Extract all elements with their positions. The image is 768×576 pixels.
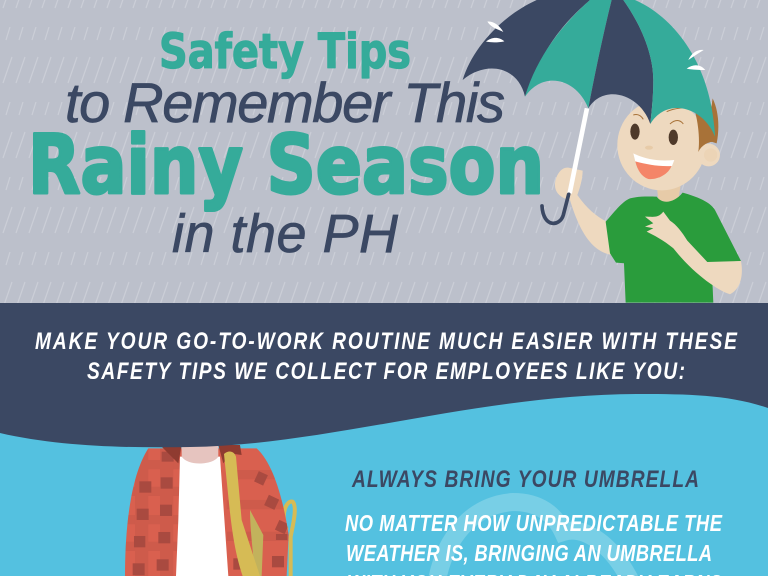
white undershirt bbox=[176, 457, 228, 576]
text block: tip body bbox=[345, 511, 723, 576]
umbrella canopy bbox=[463, 0, 590, 97]
plaid shirt bbox=[125, 448, 289, 576]
icon: umbrella watermark bbox=[437, 502, 630, 576]
right arm and hand bbox=[645, 212, 742, 294]
eyes bbox=[630, 124, 640, 140]
text block: intro: MAKE YOUR GO-TO-WORK ROUTINE MUCH EASIER WITH THESE bbox=[35, 327, 738, 355]
plaid pattern bbox=[125, 448, 293, 576]
nose bbox=[645, 146, 653, 150]
text block: tip body: WEATHER IS, BRINGING AN UMBRELLA bbox=[346, 541, 712, 567]
hair bbox=[695, 112, 715, 152]
panel: rainy header background bbox=[0, 0, 768, 304]
heading: title: Rainy Season bbox=[28, 119, 544, 213]
ear bbox=[697, 144, 720, 166]
panel: intro banner bbox=[0, 303, 768, 447]
text block: intro: SAFETY TIPS WE COLLECT FOR EMPLOYEES LIKE YOU: bbox=[87, 357, 685, 385]
collar bbox=[160, 445, 242, 463]
text block: intro bbox=[35, 327, 738, 385]
neck bbox=[657, 185, 681, 204]
left arm and hand bbox=[555, 168, 612, 255]
heading: tip title: ALWAYS BRING YOUR UMBRELLA bbox=[351, 465, 699, 493]
yellow strap bbox=[224, 451, 260, 576]
plaid checks bbox=[133, 452, 289, 575]
heading: title: Safety Tips bbox=[159, 24, 411, 80]
shirt bbox=[606, 193, 741, 303]
umbrella handle bbox=[570, 108, 587, 193]
bag strap loop bbox=[284, 502, 295, 576]
heading: title: to Remember This bbox=[65, 71, 505, 134]
mouth bbox=[635, 161, 672, 179]
heading: title: in the PH bbox=[172, 204, 399, 264]
heading: title bbox=[28, 24, 544, 264]
head bbox=[617, 100, 706, 190]
neck bbox=[182, 443, 218, 464]
water drops on umbrella bbox=[486, 22, 705, 70]
bag body bbox=[250, 510, 263, 576]
hair back bbox=[707, 98, 718, 143]
panel: blue tips background bbox=[0, 380, 768, 576]
text block: tip body: NO MATTER HOW UNPREDICTABLE THE bbox=[345, 511, 723, 537]
illustration: person with plaid shirt bbox=[125, 443, 295, 576]
icon: boy holding umbrella bbox=[463, 0, 742, 303]
